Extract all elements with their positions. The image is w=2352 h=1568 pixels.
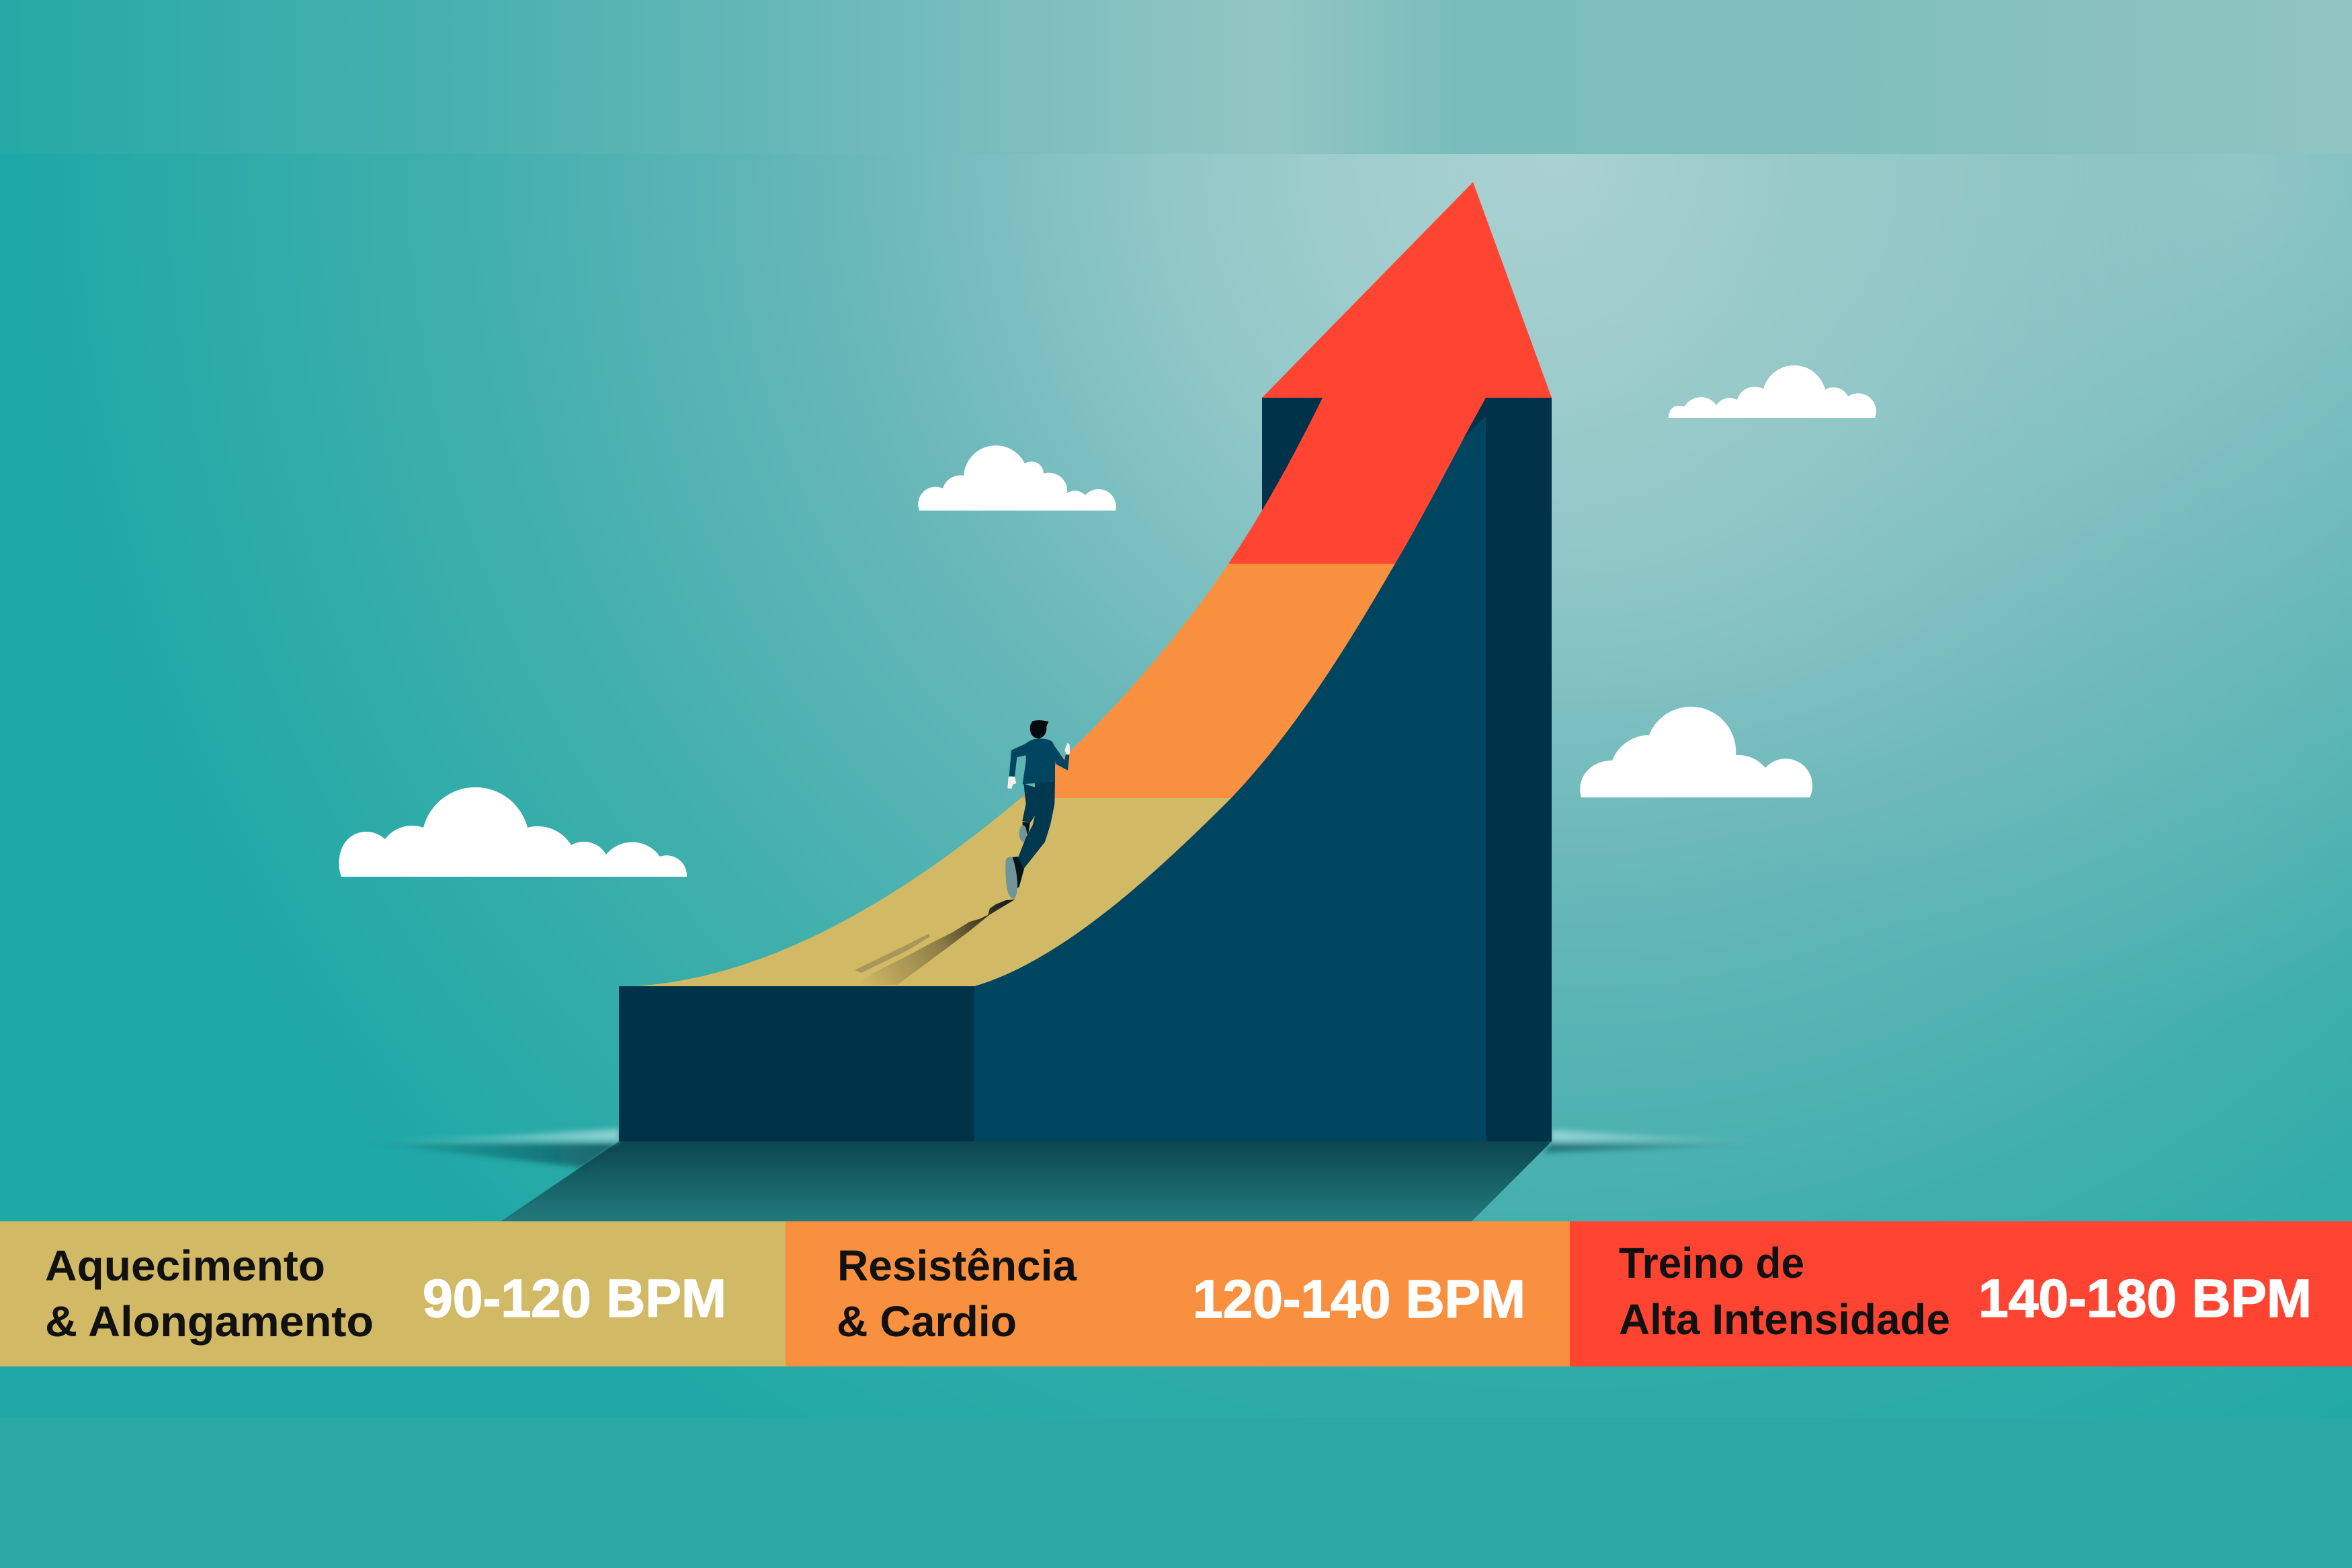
block: main ramp face xyxy=(974,398,1486,1141)
cloud: left xyxy=(339,787,687,877)
trousers xyxy=(1018,781,1055,869)
arrow segment: orange cardio xyxy=(1021,564,1395,798)
floor shadow of the block xyxy=(501,1141,1552,1221)
rear leg xyxy=(1022,784,1038,823)
right glove xyxy=(1064,743,1070,754)
legend: high intensity: 140-180 BPM xyxy=(1978,1268,2312,1328)
arrow segment: red high intensity with head xyxy=(1228,182,1552,564)
legend: high intensity xyxy=(1570,1221,2352,1366)
runner shadow xyxy=(855,900,1015,985)
legend: warm-up: 90-120 BPM xyxy=(423,1268,726,1328)
block: low front step xyxy=(619,986,974,1141)
back foot sock xyxy=(1023,822,1030,835)
cloud: right xyxy=(1580,707,1812,797)
legend: cardio: 120-140 BPM xyxy=(1193,1269,1525,1329)
arrow segment: tan warm-up xyxy=(635,798,1231,986)
block: ramp face shade near top xyxy=(1464,398,1486,438)
right arm xyxy=(1055,747,1069,771)
left arm xyxy=(1009,743,1027,777)
block: rear column xyxy=(1262,398,1552,1141)
legend: warm-up: & Alongamento xyxy=(45,1297,374,1346)
legend: cardio xyxy=(786,1221,1570,1366)
legend bar xyxy=(0,1221,2352,1366)
left glove xyxy=(1007,777,1016,789)
cloud: upper centre xyxy=(918,445,1116,511)
right ground glint xyxy=(1543,1130,1774,1153)
arrow xyxy=(635,182,1552,986)
runner figure xyxy=(1005,720,1070,900)
left ground glint xyxy=(363,1129,619,1168)
head xyxy=(1030,720,1048,738)
legend: cardio: & Cardio xyxy=(837,1297,1017,1346)
front shoe sole xyxy=(1005,857,1017,900)
legend: warm-up xyxy=(0,1221,786,1366)
legend: cardio: Resistência xyxy=(837,1242,1077,1290)
legend: high intensity: Alta Intensidade xyxy=(1619,1295,1950,1344)
back foot sole xyxy=(1019,825,1027,842)
legend: high intensity: Treino de xyxy=(1619,1239,1804,1287)
cloud: upper right xyxy=(1669,365,1876,418)
legend: warm-up: Aquecimento xyxy=(45,1242,325,1290)
torso xyxy=(1023,738,1057,784)
front shoe side xyxy=(1013,857,1024,889)
